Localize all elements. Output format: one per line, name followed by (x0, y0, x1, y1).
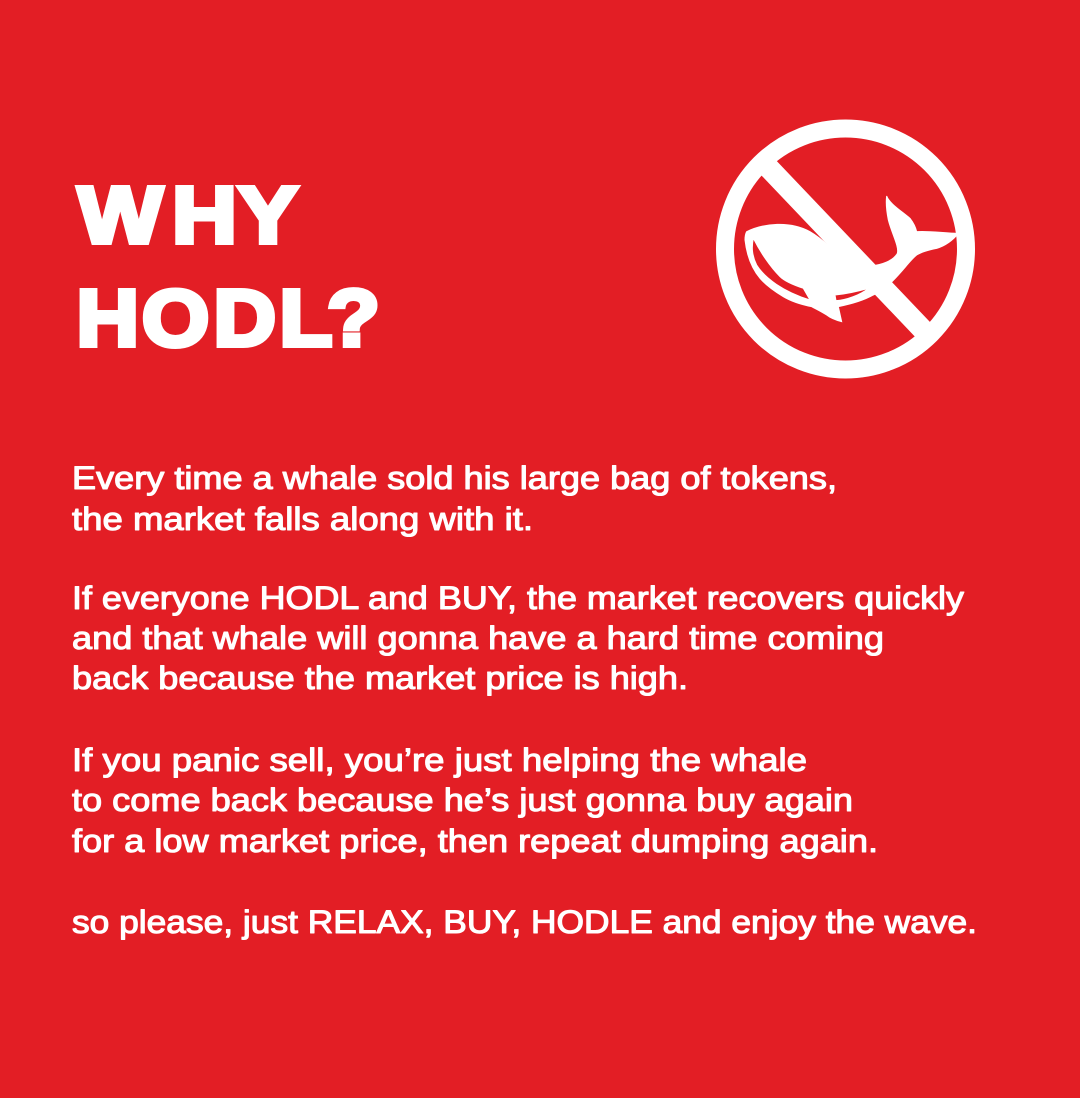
paragraph: HODL and BUY: If everyone HODL and BUY, the market recovers quickly (72, 580, 965, 616)
body text (72, 460, 977, 940)
paragraph: panic selling: to come back because he’s just gonna buy again (72, 782, 853, 818)
title: WHY HODL? (76, 170, 380, 363)
paragraph: HODL and BUY: back because the market price is high. (72, 660, 688, 696)
paragraph: whale selling (72, 460, 837, 537)
title: WHY HODL?: WHY (78, 170, 298, 259)
paragraph: panic selling: for a low market price, then repeat dumping again. (72, 823, 878, 859)
paragraph: closing message: so please, just RELAX, BUY, HODLE and enjoy the wave. (72, 904, 977, 940)
paragraph: panic selling: If you panic sell, you’re just helping the whale (72, 742, 807, 778)
title: WHY HODL?: HODL? (76, 273, 380, 363)
paragraph: panic selling (72, 742, 878, 859)
whale silhouette (745, 196, 958, 322)
paragraph: HODL and BUY (72, 580, 965, 696)
icon: prohibited whale sign (725, 128, 966, 370)
paragraph: HODL and BUY: and that whale will gonna have a hard time coming (72, 620, 884, 656)
paragraph: whale selling: Every time a whale sold his large bag of tokens, (72, 460, 837, 496)
prohibition ring (725, 128, 966, 370)
paragraph: whale selling: the market falls along with it. (72, 501, 533, 537)
prohibition slash (766, 165, 925, 332)
